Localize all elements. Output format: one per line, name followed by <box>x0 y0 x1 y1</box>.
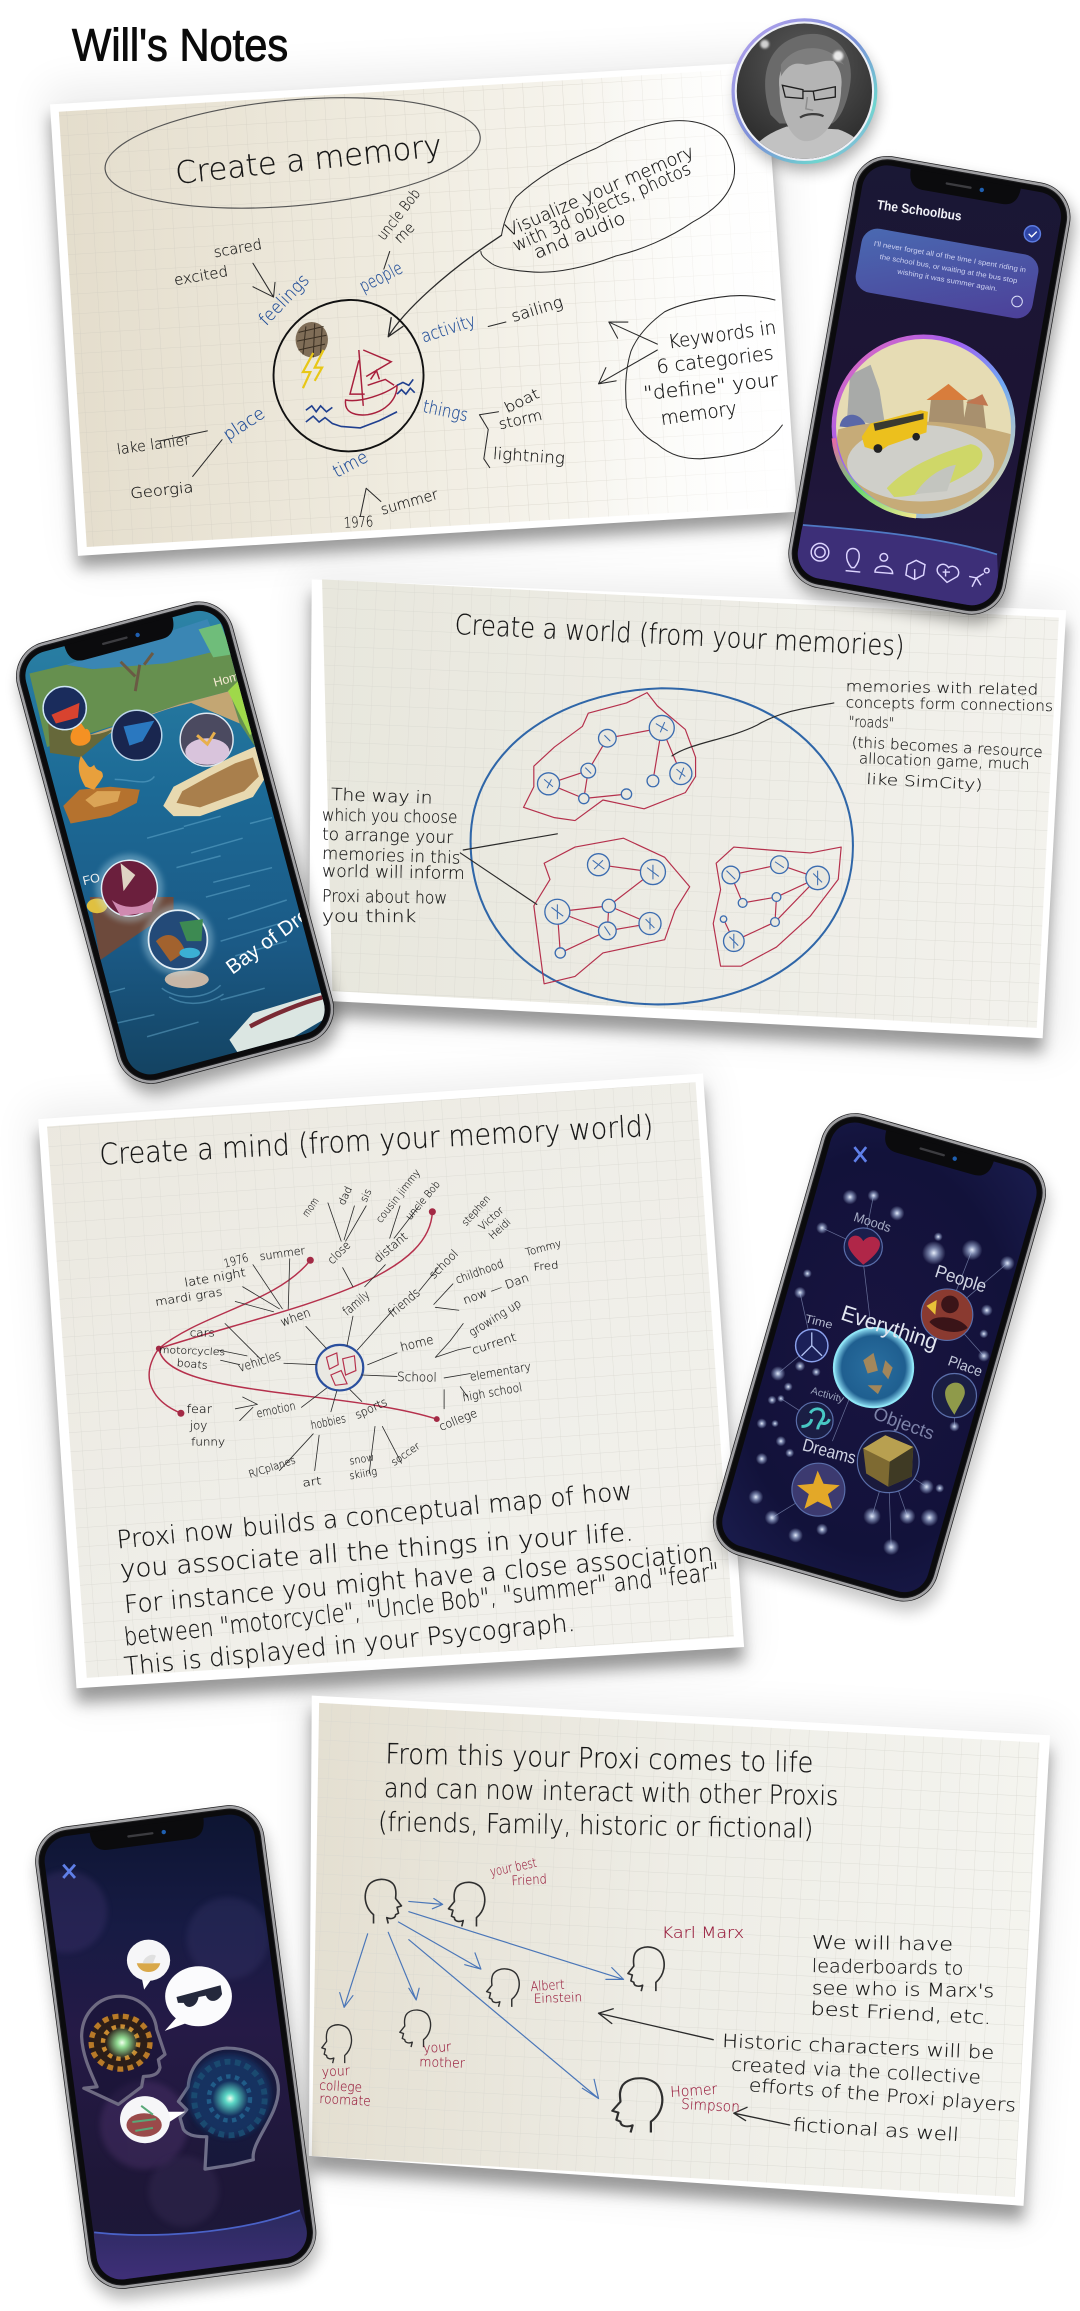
bubble: create a memory <box>101 84 485 222</box>
node: everything globe <box>834 1300 941 1407</box>
black arrows <box>599 2009 790 2125</box>
panel: proxi comes to life note <box>301 1688 1059 2221</box>
text block: Proxi now builds a conceptual map: This is displayed in your Psycograph. <box>123 1608 576 1681</box>
notch <box>881 1130 994 1179</box>
close icon <box>63 1865 75 1878</box>
speech bubble: cherry <box>120 2096 185 2143</box>
category labels: place <box>220 404 269 445</box>
note: the way in which you choose: you think <box>322 906 416 926</box>
phone: bay of dreams world screen: Home <box>212 667 248 690</box>
water highlights <box>109 776 287 1038</box>
map labels: emotion <box>255 1399 297 1421</box>
phone: bay of dreams world screen: FO <box>81 870 102 888</box>
notch <box>64 617 177 664</box>
note: leaderboards: leaderboards to <box>812 1956 963 1980</box>
map labels: cousin jimmy <box>374 1167 423 1225</box>
map labels: Tommy <box>524 1238 563 1259</box>
note: historic characters: efforts of the Proxi players <box>748 2075 1017 2117</box>
names in red: mother <box>419 2055 466 2072</box>
icon: water waves <box>306 379 415 428</box>
arrows: keywords to labels <box>599 322 657 384</box>
note: memories with related concepts <box>846 678 1053 794</box>
center node <box>316 1345 363 1390</box>
keyword annotations: me <box>391 219 418 247</box>
plant and flame <box>79 756 103 790</box>
map labels: funny <box>191 1436 225 1449</box>
map labels: Victor <box>476 1204 507 1233</box>
head: orange brain <box>82 1996 165 2104</box>
region: memory cluster two <box>534 838 690 984</box>
memory text card: wishing it was summer again. <box>896 268 998 293</box>
map labels: skiing <box>348 1466 378 1482</box>
map labels: hobbies <box>309 1411 347 1432</box>
head: blue brain <box>178 2048 278 2169</box>
note: the way in which you choose: The way in <box>331 784 433 808</box>
map labels: snow <box>348 1451 375 1468</box>
mind map <box>149 1167 563 1490</box>
bubble: visualize your memory: and audio <box>531 209 629 263</box>
memory circle drawing <box>274 300 424 451</box>
map labels: uncle Bob <box>403 1179 443 1223</box>
keyword annotations: scared <box>212 236 263 261</box>
map labels <box>154 1167 563 1490</box>
node: people <box>921 1260 989 1340</box>
map labels: stephen <box>459 1193 493 1228</box>
node: dreams star: Dreams <box>800 1435 858 1468</box>
note: leaderboards: best Friend, etc. <box>810 1999 992 2029</box>
names in red: your best <box>489 1856 538 1880</box>
map labels: family <box>339 1287 373 1318</box>
note: the way in which you choose: world will inform <box>322 860 465 883</box>
map labels: cars <box>190 1328 215 1340</box>
note: historic characters: created via the collective <box>731 2055 981 2089</box>
keyword annotations <box>116 186 566 532</box>
node: moods heart: Moods <box>852 1209 893 1235</box>
category labels: activity <box>419 311 478 347</box>
note: historic characters: Historic characters will be <box>722 2031 995 2064</box>
panel: create a memory note <box>44 51 797 568</box>
map labels: mom <box>300 1196 322 1219</box>
world map diagram <box>471 688 853 1004</box>
icon: storm cloud <box>296 322 328 357</box>
map labels: boats <box>176 1357 208 1372</box>
region: memory cluster three <box>713 847 841 966</box>
map labels: childhood <box>454 1256 505 1287</box>
map labels: when <box>278 1305 312 1329</box>
map labels: summer <box>259 1244 306 1263</box>
map labels: motorcycles <box>159 1345 225 1358</box>
memory text card: I'll never forget all of the time I spent riding in <box>873 241 1027 274</box>
speech bubble: cake <box>127 1940 170 1990</box>
memory bubbles <box>43 686 233 975</box>
heading: from this your Proxi comes to life: and can now interact with other Proxis <box>384 1773 839 1812</box>
keyword annotations: uncle Bob <box>374 186 424 244</box>
boat <box>229 993 329 1056</box>
heading: from this your Proxi comes to life <box>378 1737 839 1845</box>
phone: everything psychograph screen <box>691 1096 1059 1620</box>
note: leaderboards: We will have <box>812 1933 953 1955</box>
map labels: late night <box>183 1265 247 1290</box>
screen title: The Schoolbus <box>876 197 963 224</box>
note: historic characters: fictional as well <box>792 2115 959 2146</box>
keyword annotations: lightning <box>492 444 566 468</box>
note: historic characters <box>722 2031 1017 2146</box>
region: memory cluster one <box>524 693 696 821</box>
keyword annotations: sailing <box>509 292 565 326</box>
category labels: people <box>356 259 406 297</box>
text block: Proxi now builds a conceptual map: Proxi now builds a conceptual map of how <box>115 1476 633 1554</box>
map labels: elementary <box>469 1359 532 1384</box>
map labels: growing up <box>466 1296 524 1339</box>
node: dreams star <box>792 1435 858 1516</box>
node: everything globe: Everything <box>838 1300 941 1355</box>
top land <box>30 636 256 747</box>
note: memories with related concepts: concepts form connections <box>846 694 1053 715</box>
names in red: Simpson <box>681 2096 740 2116</box>
note: memories with related concepts: memories with related <box>846 678 1038 699</box>
keyword annotations: excited <box>173 263 229 289</box>
note: the way in which you choose <box>322 784 465 926</box>
panel: create a world note <box>301 574 1066 1053</box>
bubble: keywords: "define" your <box>642 368 779 405</box>
map labels: School <box>397 1369 437 1385</box>
map labels: Bay of Dreams <box>222 880 345 979</box>
map labels: mardi gras <box>154 1285 223 1309</box>
category labels: time <box>330 447 372 482</box>
keyword annotations: lake lanier <box>116 431 192 458</box>
bubble: keywords: Keywords in <box>667 316 778 353</box>
bubble: keywords: memory <box>659 397 738 430</box>
node: time: Time <box>804 1312 834 1332</box>
keyword annotations: boat <box>502 385 542 417</box>
keyword annotations: 1976 <box>343 513 374 532</box>
names in red: your <box>423 2040 452 2057</box>
bubble: create a memory: Create a memory <box>174 128 443 192</box>
map labels: 1976 <box>222 1251 250 1271</box>
map labels: high school <box>461 1380 523 1404</box>
text block: Proxi now builds a conceptual map <box>115 1476 721 1681</box>
note: the way in which you choose: Proxi about how <box>322 885 447 908</box>
icon: sailboat <box>345 350 397 415</box>
map labels: college <box>437 1406 479 1434</box>
panel: create a mind note <box>29 1066 750 1703</box>
nav icons <box>811 543 989 587</box>
memory text card <box>853 226 1041 321</box>
note: memories with related concepts: "roads" <box>848 713 895 732</box>
bubble: keywords <box>626 296 782 459</box>
heading: create a world: Create a world (from your memories) <box>454 608 905 663</box>
names in red: Friend <box>511 1872 547 1889</box>
notch <box>908 168 1021 207</box>
node: activity <box>796 1386 846 1439</box>
sand island <box>163 746 266 816</box>
portrait bubble <box>732 20 879 171</box>
node: objects cube: Objects <box>871 1402 937 1444</box>
phone: the schoolbus memory screen <box>779 147 1080 632</box>
map labels: dad <box>336 1185 355 1207</box>
node: time <box>796 1312 834 1362</box>
memory sphere <box>832 334 1016 518</box>
head icons <box>322 1879 664 2133</box>
title: Will's Notes <box>72 19 288 70</box>
note: memories with related concepts: allocation game, much <box>859 750 1030 773</box>
close icon <box>854 1147 866 1162</box>
map labels: friends <box>385 1285 423 1320</box>
keyword annotations: summer <box>379 486 441 519</box>
note: leaderboards: see who is Marx's <box>812 1978 994 2002</box>
names in red: Albert <box>530 1978 565 1995</box>
text block: Proxi now builds a conceptual map: For instance you might have a close association <box>123 1538 714 1619</box>
map labels: distant <box>371 1229 411 1266</box>
note: memories with related concepts: (this becomes a resource <box>851 734 1043 761</box>
bubble: visualize your memory <box>481 121 735 272</box>
icon: check badge <box>1024 226 1040 242</box>
map labels: close <box>325 1238 353 1267</box>
map labels: art <box>302 1474 322 1490</box>
blue arrows <box>340 1899 624 2099</box>
map labels: sports <box>353 1395 389 1422</box>
map labels: vehicles <box>236 1347 283 1375</box>
category labels: feelings <box>255 271 314 330</box>
note: the way in which you choose: memories in this <box>322 843 461 868</box>
bubble: visualize your memory: with 3d objects, photos <box>510 159 694 256</box>
node: place <box>932 1353 984 1418</box>
map labels: current <box>470 1330 518 1357</box>
text block: Proxi now builds a conceptual map: you associate all the things in your life. <box>119 1517 634 1584</box>
category labels: things <box>421 397 470 426</box>
names in red: Einstein <box>533 1989 582 2006</box>
lower shore <box>90 897 174 960</box>
callout lines <box>460 703 834 904</box>
node: place: Place <box>946 1353 984 1381</box>
note: the way in which you choose: which you choose <box>322 805 458 827</box>
node: objects cube <box>857 1402 937 1493</box>
associative red curves <box>149 1208 440 1422</box>
names in red: college <box>319 2079 362 2096</box>
names in red: Karl Marx <box>662 1923 744 1942</box>
phone: bay of dreams world screen <box>0 588 353 1102</box>
map labels: R/Cplanes <box>247 1454 297 1481</box>
map labels: home <box>399 1332 435 1354</box>
memory text card: the school bus, or waiting at the bus stop <box>879 254 1018 285</box>
icon: lightning <box>303 350 324 388</box>
names in red: Homer <box>670 2081 719 2101</box>
map labels: Fred <box>533 1259 559 1274</box>
phone: proxi conversation screen <box>15 1801 338 2311</box>
notch <box>90 1817 206 1852</box>
heading: create a mind: Create a mind (from your memory world) <box>99 1109 654 1172</box>
names in red: your <box>321 2064 351 2080</box>
text block: Proxi now builds a conceptual map: between "motorcycle", "Uncle Bob", "summer" and "fear" <box>122 1557 721 1652</box>
node: moods heart <box>844 1209 893 1266</box>
note: leaderboards <box>810 1933 994 2029</box>
category labels <box>220 259 478 482</box>
node: activity: Activity <box>809 1386 846 1406</box>
map labels: joy <box>189 1418 207 1432</box>
bubble: keywords: 6 categories <box>655 341 775 378</box>
star field <box>749 1190 1015 1555</box>
school bus <box>862 410 928 451</box>
orange island <box>63 787 140 824</box>
keyword annotations: Georgia <box>130 479 194 503</box>
map labels: sis <box>358 1187 374 1204</box>
map labels: now — Dan <box>461 1270 531 1307</box>
branch lines <box>218 1203 471 1474</box>
note: memories with related concepts: like SimCity) <box>866 771 983 794</box>
speech bubble: sunglasses <box>165 1966 232 2031</box>
names in red: roomate <box>319 2092 371 2110</box>
node: people: People <box>933 1260 989 1297</box>
names in red <box>319 1856 744 2116</box>
note: the way in which you choose: to arrange your <box>322 824 453 847</box>
map labels: Heidi <box>487 1216 513 1242</box>
map labels: school <box>426 1247 461 1282</box>
keyword annotations: storm <box>497 407 544 433</box>
map labels: soccer <box>389 1440 423 1469</box>
heading: from this your Proxi comes to life: From this your Proxi comes to life <box>385 1737 814 1779</box>
arrow: bubble to memory circle <box>388 235 501 337</box>
heading: from this your Proxi comes to life: (friends, Family, historic or fictional) <box>378 1807 814 1845</box>
map labels: fear <box>187 1402 212 1416</box>
bubble: visualize your memory: Visualize your memory <box>503 142 697 241</box>
